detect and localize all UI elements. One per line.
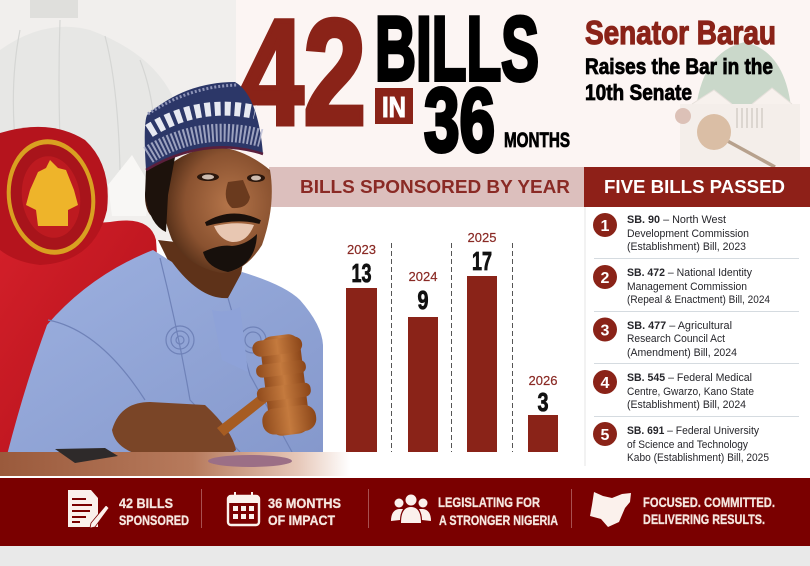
- bill 1: SB. 90 – North West: [627, 214, 726, 226]
- chair back: [0, 220, 158, 460]
- footer item: 42 bills sponsored: 42 BILLS: [119, 495, 173, 511]
- headline: IN badge: IN: [382, 92, 406, 124]
- bar chart: bills sponsored by year: [346, 230, 558, 452]
- bill 3: Research Council Act: [627, 333, 725, 345]
- forearm and hand: [112, 402, 236, 467]
- neck: [158, 240, 245, 312]
- gavel: [217, 332, 318, 438]
- bills passed list: [585, 207, 799, 466]
- footer item: legislating for a stronger nigeria: LEGISLATING FOR: [438, 494, 540, 510]
- bill 1: 1: [601, 218, 610, 235]
- bar: 2023: [346, 242, 377, 452]
- subtitle: raises the bar: Raises the Bar in the: [585, 54, 773, 79]
- subtitle: Senator Barau: Senator Barau: [585, 14, 776, 51]
- footer item: 36 months of impact: 36 MONTHS: [268, 495, 341, 511]
- bill 4: Centre, Gwarzo, Kano State: [627, 386, 754, 398]
- bill 4: (Establishment) Bill, 2024: [627, 399, 746, 411]
- head: [162, 148, 272, 273]
- icon: document and pen: [68, 490, 109, 528]
- footer item: 36 months of impact: [268, 495, 341, 528]
- bill 2: SB. 472 – National Identity: [627, 267, 752, 279]
- bill 5: [593, 422, 769, 464]
- bill 5: SB. 691 – Federal University: [627, 425, 759, 437]
- footer item: focused committed delivering results: [643, 494, 775, 527]
- bill 3: (Amendment) Bill, 2024: [627, 347, 737, 359]
- background photo: senate dome: [0, 0, 236, 240]
- eyes: [197, 173, 265, 182]
- bar: 2025: [467, 230, 497, 452]
- subtitle: raises the bar: 10th Senate: [585, 80, 692, 105]
- footer item: 42 bills sponsored: [119, 495, 189, 528]
- bill 3: SB. 477 – Agricultural: [627, 320, 732, 332]
- hair: [145, 152, 176, 232]
- section header: bills sponsored by year: BILLS SPONSORED BY YEAR: [300, 177, 570, 197]
- headline: 36: 36: [424, 71, 495, 171]
- section header: five bills passed: FIVE BILLS PASSED: [604, 177, 785, 197]
- bill 5: 5: [601, 427, 610, 444]
- footer band: [0, 478, 810, 546]
- bill 3: 3: [601, 322, 610, 340]
- ear: [145, 176, 167, 218]
- bar: 2026: 2026: [529, 373, 557, 388]
- header background: [235, 0, 810, 167]
- phone on desk: [55, 448, 118, 463]
- bill 2: Management Commission: [627, 281, 747, 293]
- section header: bills sponsored by year: [269, 167, 584, 207]
- footer item: focused committed delivering results: FOCUSED. COMMITTED.: [643, 494, 775, 510]
- bill 4: [593, 370, 754, 411]
- robe: [7, 250, 323, 455]
- bar: 2026: [528, 373, 558, 452]
- bill 2: (Repeal & Enactment) Bill, 2024: [627, 294, 770, 306]
- subtitle: raises the bar: [585, 54, 773, 105]
- bill 2: 2: [601, 270, 610, 287]
- chart separators: [392, 243, 512, 452]
- icon: people: [391, 494, 431, 523]
- bill 1: (Establishment) Bill, 2023: [627, 241, 746, 253]
- beard: [203, 234, 257, 272]
- icon: calendar: [228, 492, 259, 525]
- bar: 2023: 2023: [347, 242, 376, 257]
- nose: [226, 180, 250, 208]
- bill 1: Development Commission: [627, 228, 749, 240]
- footer item: legislating for a stronger nigeria: A STRONGER NIGERIA: [439, 512, 558, 528]
- bill 2: [593, 265, 770, 306]
- footer item: focused committed delivering results: DELIVERING RESULTS.: [643, 511, 765, 527]
- bill 5: of Science and Technology: [627, 439, 748, 451]
- footer item: 36 months of impact: OF IMPACT: [268, 512, 335, 528]
- bill 1: [593, 213, 749, 253]
- footer item: legislating for a stronger nigeria: [438, 494, 558, 528]
- bill 4: SB. 545 – Federal Medical: [627, 372, 752, 384]
- headline: IN badge: [375, 88, 413, 124]
- portrait: senator at chair with gavel: [0, 82, 350, 476]
- bar: 2024: 2024: [409, 269, 437, 284]
- inner robe and embroidery: [48, 258, 292, 452]
- bar: 2025: 2025: [468, 230, 496, 245]
- bill 3: [593, 318, 737, 359]
- chair headrest: [0, 127, 108, 265]
- bill 4: 4: [601, 375, 610, 392]
- desk: [0, 452, 350, 476]
- headline: BILLS: BILLS: [375, 0, 539, 100]
- cap: [145, 82, 263, 170]
- bar: 2024: [408, 269, 438, 452]
- watermark: national assembly building and mace: [675, 42, 800, 167]
- bar: 2025: 17: [472, 246, 492, 276]
- icon: map of Nigeria: [590, 492, 631, 527]
- headline: MONTHS: MONTHS: [504, 129, 570, 152]
- bill 5: Kabo (Establishment) Bill, 2025: [627, 452, 769, 464]
- seal on headrest: [0, 133, 103, 261]
- footer item: 42 bills sponsored: SPONSORED: [119, 512, 189, 528]
- inner tunic: [212, 307, 248, 372]
- paper on desk: [208, 455, 292, 467]
- moustache and mouth: [206, 215, 260, 224]
- bar: 2026: 3: [538, 387, 548, 417]
- bottom strip: [0, 546, 810, 566]
- section header: five bills passed: [584, 167, 810, 207]
- bar: 2024: 9: [418, 285, 428, 315]
- bar: 2023: 13: [352, 258, 372, 288]
